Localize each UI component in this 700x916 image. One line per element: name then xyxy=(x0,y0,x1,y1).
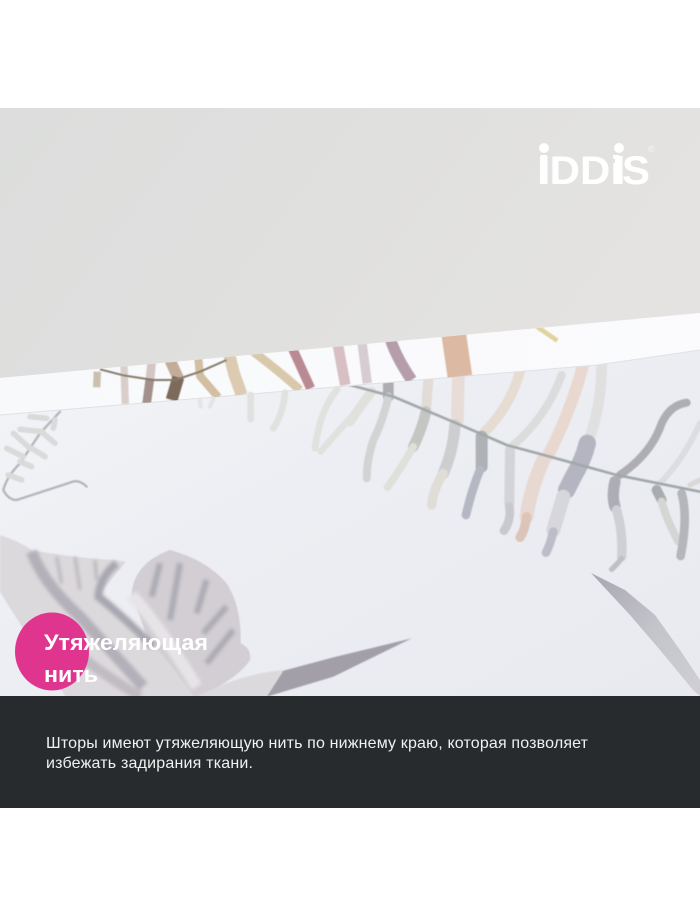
leaf blade, lower right xyxy=(591,573,700,696)
frond stem xyxy=(350,385,700,492)
dark description band xyxy=(0,696,700,808)
butterfly tail xyxy=(267,638,412,697)
description text: Шторы имеют утяжеляющую нить по нижнему краю, которая позволяет xyxy=(46,735,589,752)
iDDiS logo: iDDiS xyxy=(538,149,650,193)
leaflets xyxy=(350,392,372,422)
butterfly wings xyxy=(0,535,412,698)
iDDiS logo xyxy=(539,143,654,184)
iDDiS logo: ® xyxy=(648,144,655,154)
badge heading: Утяжеляющая xyxy=(44,630,208,655)
infographic canvas xyxy=(0,108,700,808)
large fern frond, right xyxy=(350,365,700,569)
small fern, left xyxy=(3,412,87,500)
photo panel: curtain on wall xyxy=(0,108,700,698)
curtain fabric xyxy=(0,313,700,696)
pink badge blob xyxy=(15,612,89,690)
wing shadows xyxy=(32,552,233,697)
pale leaflets under hem, left xyxy=(200,389,350,452)
left wing xyxy=(0,535,195,698)
wall background xyxy=(0,108,700,388)
hem fold line xyxy=(0,350,700,415)
description text: избежать задирания ткани. xyxy=(46,755,253,772)
right wing xyxy=(132,550,250,697)
leaf stems printed on hem xyxy=(97,326,557,404)
curtain hem xyxy=(2,313,700,404)
badge heading: нить xyxy=(44,662,98,687)
